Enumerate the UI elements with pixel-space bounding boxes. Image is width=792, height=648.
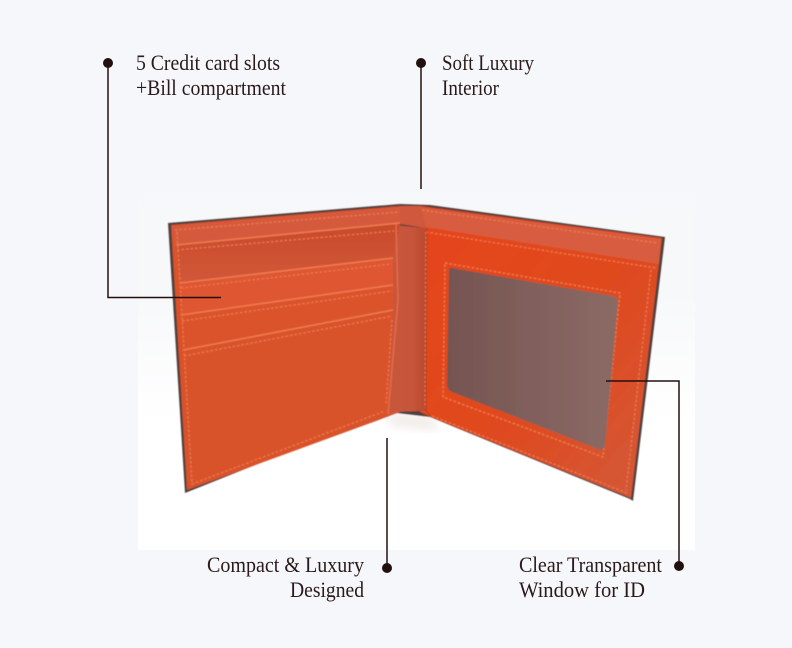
right pocket edge: [426, 228, 431, 417]
photo backdrop: [138, 150, 695, 550]
stitching: [175, 210, 658, 493]
label: +Bill compartment: [136, 75, 286, 100]
label: Clear Transparent: [519, 552, 662, 577]
callout: clear ID window: [519, 381, 684, 602]
label: Interior: [442, 75, 500, 100]
clear ID window: [443, 263, 620, 457]
marker dot: [103, 58, 113, 68]
marker dot: [382, 563, 392, 573]
soft shadow under wallet: [388, 414, 440, 430]
leader line: [420, 63, 422, 189]
label: Designed: [290, 577, 364, 602]
marker dot: [416, 58, 426, 68]
card slots: [176, 223, 400, 489]
wallet dark edges: [168, 204, 665, 501]
callout: soft luxury interior: [416, 50, 540, 189]
leader line: [108, 63, 221, 298]
upper lining strips: [172, 207, 400, 245]
right panel leather: [420, 206, 662, 498]
label: Compact & Luxury: [207, 552, 364, 577]
left panel leather: [171, 206, 400, 490]
center spine: [388, 225, 426, 412]
wallet photo illustration: [168, 204, 665, 501]
leader line: [606, 381, 679, 566]
callout: compact and luxury design: [207, 438, 392, 602]
leader line: [386, 438, 388, 568]
marker dot: [674, 561, 684, 571]
label: Window for ID: [519, 577, 645, 602]
callout: credit card slots: [103, 50, 286, 298]
label: 5 Credit card slots: [136, 50, 280, 75]
label: Soft Luxury: [442, 50, 534, 75]
